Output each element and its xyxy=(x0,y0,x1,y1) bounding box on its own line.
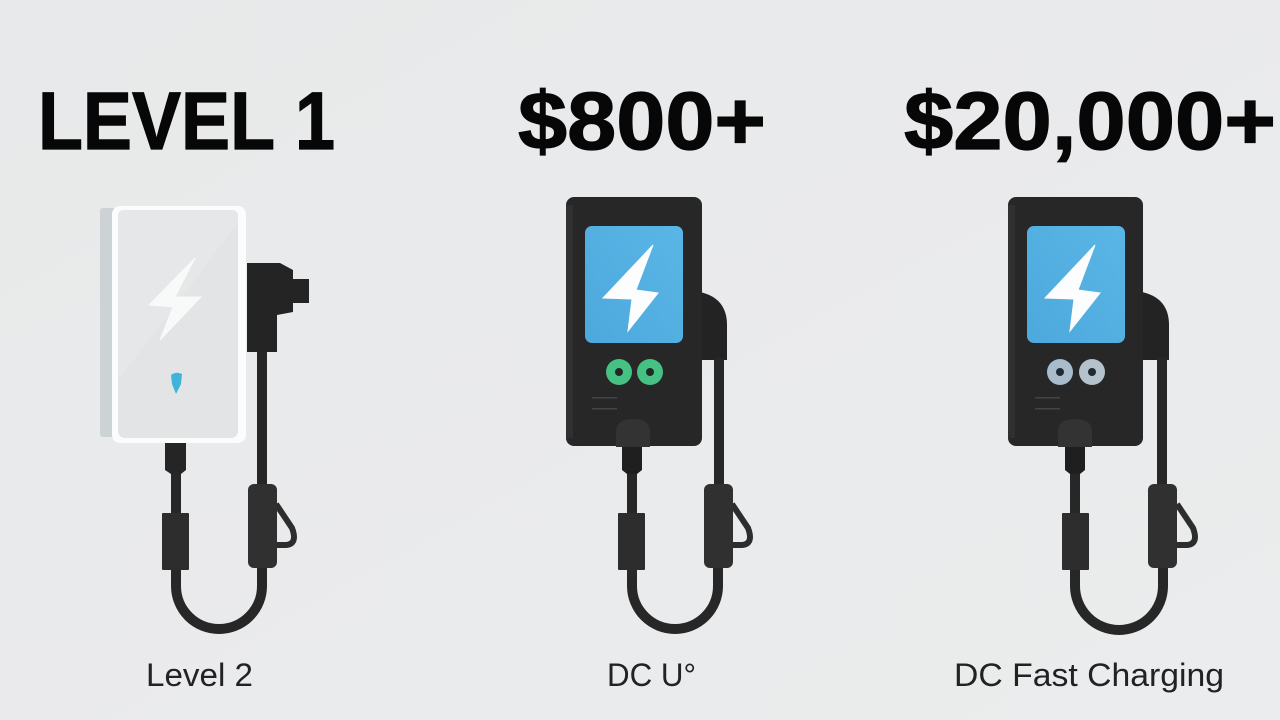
green port right xyxy=(637,359,663,385)
vent lines xyxy=(1035,397,1060,410)
screen xyxy=(1027,226,1125,343)
label: DC Fast Charging: DC Fast Charging xyxy=(954,657,1224,693)
white casing xyxy=(112,206,246,443)
side cable top xyxy=(257,352,267,486)
icon: lightning bolt xyxy=(1045,245,1100,331)
side cable top xyxy=(1157,358,1167,486)
dark casing xyxy=(1008,197,1143,446)
grey port right xyxy=(1079,359,1105,385)
heading: $800+ price: $800+ xyxy=(518,76,766,167)
side plug hook xyxy=(1142,292,1169,360)
vent lines xyxy=(592,397,617,410)
green port left xyxy=(606,359,632,385)
dark casing xyxy=(566,197,702,446)
icon: lightning bolt xyxy=(149,258,201,340)
cable assembly xyxy=(1062,474,1195,630)
charger 2: dark unit with green ports xyxy=(566,197,750,629)
charger 3: dark unit with grey ports xyxy=(1008,197,1195,630)
icon: teal indicator xyxy=(171,373,182,394)
icon: lightning bolt xyxy=(603,245,658,331)
cable gland xyxy=(1058,419,1092,447)
charger 1: white wall unit xyxy=(100,206,309,629)
cable assembly xyxy=(618,474,750,629)
heading: $20,000+ price: $20,000+ xyxy=(904,76,1276,167)
grey port left xyxy=(1047,359,1073,385)
label: DC U: DC U° xyxy=(607,657,696,693)
bottom connector xyxy=(165,443,186,482)
left edge highlight xyxy=(1008,205,1015,438)
screen xyxy=(585,226,683,343)
heading: Level 1: LEVEL xyxy=(38,76,275,167)
side shadow xyxy=(100,208,114,437)
angled plug xyxy=(247,263,309,352)
left edge highlight xyxy=(566,205,573,438)
cable gland xyxy=(616,419,650,447)
inner face xyxy=(118,210,238,438)
heading: Level 1: 1 xyxy=(295,76,335,167)
cable assembly xyxy=(162,474,294,629)
side cable top xyxy=(714,358,724,486)
label: Level 2: Level 2 xyxy=(146,657,253,693)
side plug hook xyxy=(700,292,727,360)
